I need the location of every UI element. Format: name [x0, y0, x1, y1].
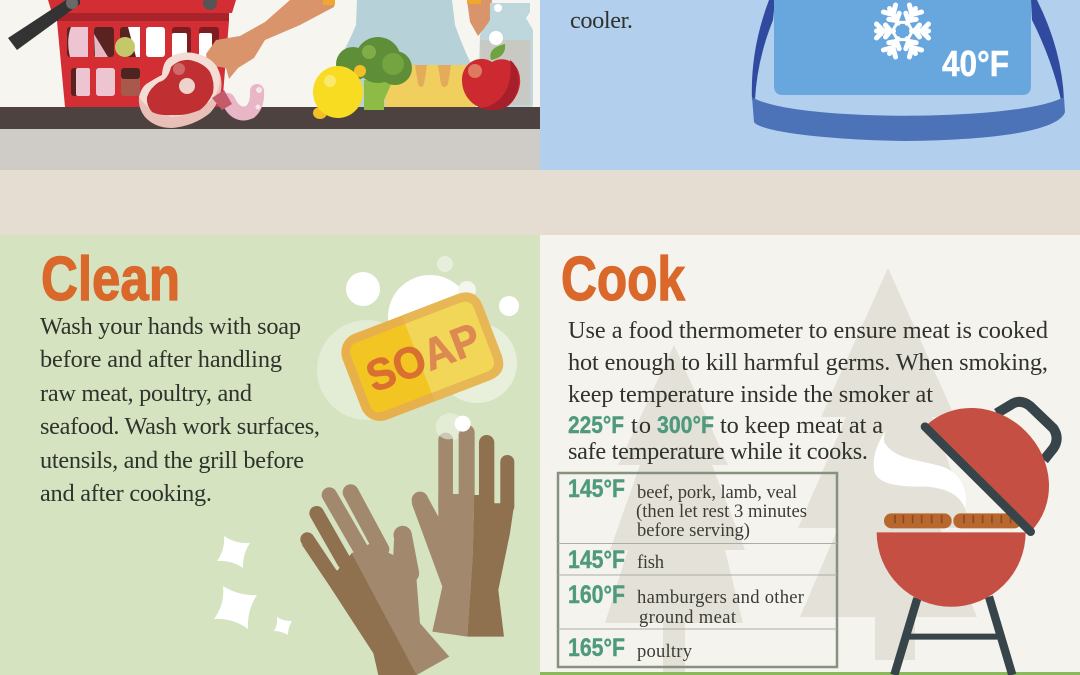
steak — [139, 53, 222, 128]
icon: soap and bubbles — [317, 256, 519, 441]
text block: cook instructions: 300°F — [657, 412, 714, 439]
icon: snowflake — [876, 5, 928, 57]
text block: cook instructions: safe temperature while it cooks. — [568, 438, 868, 465]
table: safe temperatures: 165°F — [568, 634, 625, 662]
icon: cooler bag — [752, 0, 1065, 141]
lemon — [313, 65, 366, 119]
table: safe temperatures: hamburgers and other — [637, 587, 805, 608]
panel: clean — [0, 235, 540, 675]
arm and hand — [206, 0, 335, 79]
table: safe temperatures: ground meat — [639, 607, 737, 628]
table: safe temperatures: 145°F — [568, 475, 625, 503]
text block: cook instructions: 225°F — [568, 412, 624, 439]
panel: shopping illustration — [0, 0, 540, 170]
text block: cook instructions: keep temperature inside the smoker at — [568, 381, 933, 408]
icon: sparkles — [214, 536, 292, 635]
table: safe temperatures: 145°F — [568, 546, 625, 574]
text block: clean instructions: and after cooking. — [40, 480, 212, 507]
table: safe temperatures: fish — [637, 552, 665, 573]
table: safe temperatures: before serving) — [637, 520, 750, 541]
table: safe temperatures — [558, 473, 837, 667]
text block: clean instructions — [40, 313, 320, 507]
counter — [0, 107, 540, 129]
text block: clean instructions: seafood. Wash work surfaces, — [40, 413, 320, 440]
bread — [385, 65, 476, 107]
text block: clean instructions: raw meat, poultry, and — [40, 380, 252, 407]
apple — [462, 44, 520, 110]
right arm — [467, 0, 492, 36]
table: safe temperatures: beef, pork, lamb, veal — [637, 482, 797, 503]
table: safe temperatures: (then let rest 3 minutes — [636, 501, 807, 522]
icon: kettle grill — [874, 402, 1057, 675]
shopping basket — [8, 0, 236, 107]
milk bottle — [478, 3, 533, 107]
text block: clean instructions: before and after handling — [40, 346, 282, 373]
cooler temperature: 40°F — [942, 43, 1009, 84]
text block: cook instructions: Use a food thermometer to ensure meat is cooked — [568, 317, 1048, 344]
panel: cook — [540, 235, 1080, 675]
panel: chill, blue cooler — [540, 0, 1080, 170]
body text: cooler: cooler. — [570, 7, 633, 34]
soap label: SOAP — [360, 314, 487, 402]
icon: gloves — [301, 414, 514, 675]
text block: cook instructions: to — [631, 412, 651, 439]
text block: cook instructions: to keep meat at a — [720, 412, 883, 439]
table: safe temperatures: poultry — [637, 641, 693, 662]
shrimp — [212, 87, 262, 114]
text block: clean instructions: Wash your hands with soap — [40, 313, 301, 340]
background trees — [605, 268, 977, 672]
text block: cook instructions: hot enough to kill harmful germs. When smoking, — [568, 349, 1048, 376]
broccoli — [336, 37, 412, 110]
text block: clean instructions: utensils, and the grill before — [40, 447, 304, 474]
heading: Cook: Cook — [561, 245, 685, 314]
apron — [332, 0, 476, 110]
table: safe temperatures: 160°F — [568, 581, 625, 609]
text block: cook instructions — [568, 317, 1048, 465]
heading: Clean: Clean — [41, 245, 180, 314]
